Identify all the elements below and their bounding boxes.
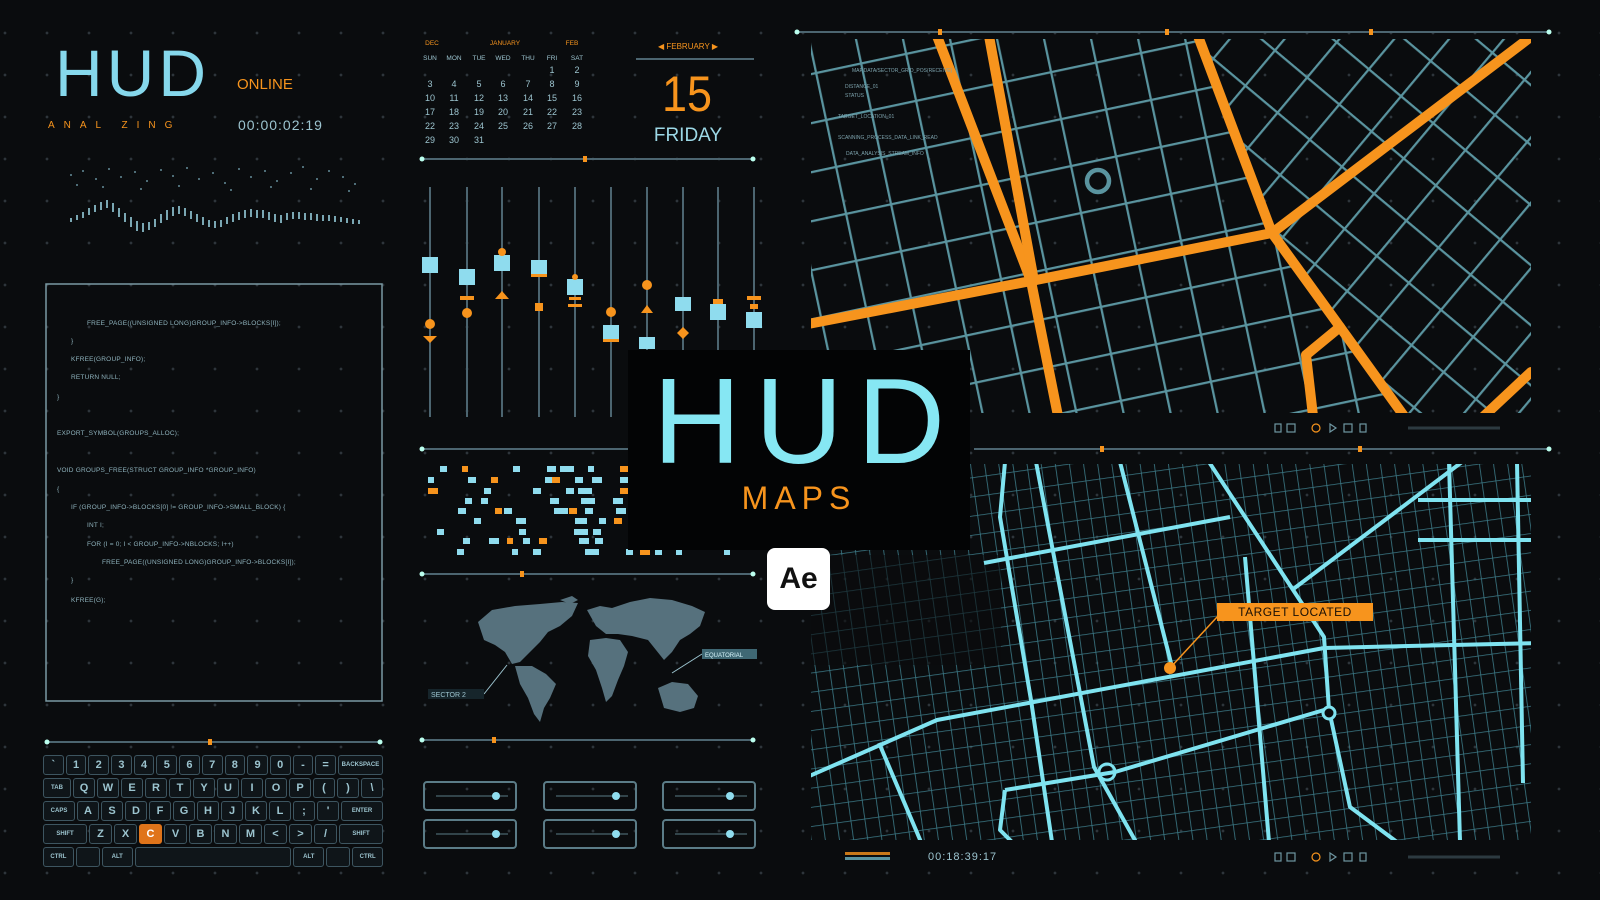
calendar: DEC [425, 40, 439, 47]
heading HUD: HUD [55, 36, 210, 110]
calendar: 23 [449, 121, 459, 131]
keyboard: = [322, 759, 329, 771]
target located callout: TARGET LOCATED [1238, 605, 1352, 619]
calendar: 12 [474, 93, 484, 103]
keyboard: K [252, 805, 260, 817]
code listing: IF (GROUP_INFO->BLOCKS[0] != GROUP_INFO->SMALL_BLOCK) { [71, 504, 286, 511]
keyboard: 8 [232, 759, 238, 771]
calendar: 27 [547, 121, 557, 131]
calendar: 17 [425, 107, 435, 117]
map1 text overlay: DISTANCE_01 [845, 84, 878, 90]
date widget: 15 [662, 67, 712, 123]
keyboard: D [132, 805, 140, 817]
keyboard: V [172, 828, 179, 840]
keyboard: 9 [254, 759, 261, 771]
keyboard: P [296, 782, 304, 794]
keyboard: F [157, 805, 163, 817]
keyboard: 7 [209, 759, 215, 771]
calendar: 14 [523, 93, 533, 103]
date widget [636, 42, 754, 146]
calendar: 16 [572, 93, 582, 103]
keyboard: T [177, 782, 183, 794]
map 1 top rule [794, 29, 1552, 35]
keyboard: - [301, 759, 305, 771]
title block [628, 350, 970, 550]
keyboard: Y [200, 782, 208, 794]
calendar: THU [521, 55, 535, 62]
calendar: 20 [498, 107, 508, 117]
code listing: INT I; [87, 522, 104, 529]
keyboard: TAB [51, 785, 63, 791]
code panel frame [46, 284, 382, 701]
calendar: 2 [574, 65, 580, 75]
keyboard: J [229, 805, 235, 817]
code listing: EXPORT_SYMBOL(GROUPS_ALLOC); [57, 430, 179, 437]
calendar: SAT [571, 55, 583, 62]
rule under equalizer [420, 446, 628, 452]
title HUD: HUD [653, 353, 959, 489]
rule above control sliders [420, 737, 756, 743]
map 2: cyan street network [805, 462, 1540, 842]
code listing: } [71, 338, 73, 345]
code listing: KFREE(GROUP_INFO); [71, 356, 145, 363]
keyboard: N [222, 828, 229, 840]
keyboard: 3 [118, 759, 124, 771]
map1 text overlay: MAP.DATA/SECTOR_GRID_POS(RECEIVE) [852, 68, 953, 74]
keyboard: CTRL [360, 854, 376, 860]
keyboard: E [128, 782, 136, 794]
calendar: FEB [566, 40, 578, 47]
calendar: 21 [523, 107, 533, 117]
waveform [70, 166, 360, 232]
calendar: FRI [547, 55, 557, 62]
code listing: { [57, 486, 59, 493]
calendar: 25 [498, 121, 508, 131]
code listing: RETURN NULL; [71, 374, 121, 381]
keyboard: < [272, 828, 279, 840]
calendar: 22 [547, 107, 557, 117]
keyboard rule [44, 739, 382, 745]
calendar: 22 [425, 121, 435, 131]
calendar: 29 [425, 135, 435, 145]
dot matrix [428, 466, 730, 555]
calendar: 10 [425, 93, 435, 103]
map label: right: EQUATORIAL [705, 653, 744, 659]
map1 text overlay: TARGET_LOCATION_01 [838, 114, 894, 120]
keyboard: Z [97, 828, 104, 840]
icon: after effects badge [767, 548, 830, 610]
calendar: 15 [547, 93, 557, 103]
calendar: 11 [449, 93, 459, 103]
analyzing label: ANAL ZING [48, 120, 181, 131]
map 1 playback controls [1275, 424, 1500, 432]
calendar: 8 [549, 79, 555, 89]
calendar: 1 [549, 65, 555, 75]
keyboard: / [324, 828, 327, 840]
keyboard: W [103, 782, 113, 794]
calendar: 19 [474, 107, 484, 117]
world map [428, 596, 757, 722]
icon: after effects badge: Ae [779, 562, 818, 595]
keyboard: I [250, 782, 254, 794]
keyboard: R [152, 782, 160, 794]
keyboard: CAPS [51, 808, 67, 814]
keyboard: 0 [277, 759, 283, 771]
keyboard: ALT [303, 854, 314, 860]
map 1: orange roads map [808, 36, 1532, 416]
control slider boxes [424, 782, 755, 848]
keyboard: SHIFT [56, 831, 74, 837]
keyboard: 4 [141, 759, 147, 771]
map1 text overlay: STATUS [845, 93, 865, 99]
calendar: 3 [427, 79, 433, 89]
keyboard: \ [370, 782, 374, 794]
rule above world map [420, 571, 756, 577]
calendar: 9 [574, 79, 580, 89]
code listing [57, 320, 296, 604]
keyboard: SHIFT [352, 831, 370, 837]
keyboard: C [147, 828, 154, 840]
keyboard: L [277, 805, 283, 817]
target located callout [1164, 603, 1373, 674]
equalizer sliders [422, 187, 762, 417]
status online: ONLINE [237, 76, 293, 93]
map1 text overlay: DATA_ANALYSIS_STREAM_INFO [846, 151, 924, 157]
calendar: 28 [572, 121, 582, 131]
date widget: FRIDAY [654, 125, 722, 146]
calendar: 31 [474, 135, 484, 145]
code listing: FREE_PAGE((UNSIGNED LONG)GROUP_INFO->BLOCKS[I]); [102, 559, 296, 566]
calendar: 7 [525, 79, 531, 89]
keyboard: X [122, 828, 129, 840]
map label: sector 2: SECTOR 2 [431, 692, 466, 699]
calendar: 6 [500, 79, 506, 89]
keyboard: M [246, 828, 255, 840]
calendar: TUE [472, 55, 486, 62]
keyboard: Q [80, 782, 88, 794]
keyboard: BACKSPACE [342, 762, 379, 768]
code listing: KFREE(G); [71, 597, 106, 604]
calendar: JANUARY [490, 40, 521, 47]
keyboard: ENTER [352, 808, 372, 814]
calendar: MON [446, 55, 462, 62]
keyboard: ; [302, 805, 306, 817]
keyboard: CTRL [50, 854, 66, 860]
calendar: 4 [451, 79, 457, 89]
keyboard: G [180, 805, 188, 817]
calendar: 26 [523, 121, 533, 131]
calendar rule [420, 156, 756, 162]
keyboard: 6 [186, 759, 193, 771]
keyboard: ' [327, 805, 329, 817]
calendar: WED [495, 55, 511, 62]
map label: right [672, 649, 757, 673]
keyboard: ) [346, 782, 350, 794]
code listing: FREE_PAGE((UNSIGNED LONG)GROUP_INFO->BLOCKS[I]); [87, 320, 281, 327]
calendar: 13 [498, 93, 508, 103]
rule between maps [974, 446, 1552, 452]
code listing: } [57, 394, 59, 401]
timecode: 00:00:02:19 [238, 117, 323, 133]
keyboard: A [84, 805, 92, 817]
calendar: 18 [449, 107, 459, 117]
keyboard: > [297, 828, 304, 840]
date widget: ◀ FEBRUARY ▶ [658, 42, 719, 51]
calendar: 5 [476, 79, 482, 89]
calendar: SUN [423, 55, 437, 62]
code listing: VOID GROUPS_FREE(STRUCT GROUP_INFO *GROUP_INFO) [57, 467, 256, 474]
keyboard: 5 [164, 759, 170, 771]
keyboard: 1 [73, 759, 79, 771]
calendar: 23 [572, 107, 582, 117]
map 2 footer: timecode and controls [845, 851, 1500, 863]
keyboard: B [197, 828, 204, 840]
keyboard: 2 [96, 759, 102, 771]
keyboard [43, 755, 383, 867]
HUD online header [48, 36, 323, 133]
keyboard: O [272, 782, 280, 794]
keyboard: ` [52, 759, 55, 771]
map1 text overlay [838, 68, 953, 157]
keyboard: S [108, 805, 116, 817]
calendar: 30 [449, 135, 459, 145]
keyboard: U [224, 782, 232, 794]
keyboard: H [204, 805, 212, 817]
code listing: FOR (I = 0; I < GROUP_INFO->NBLOCKS; I++) [87, 541, 234, 548]
calendar [423, 40, 583, 145]
code listing: } [71, 577, 73, 584]
map 2 footer: timecode and controls: 00:18:39:17 [928, 851, 997, 863]
map label: sector 2 [428, 665, 507, 699]
subtitle MAPS: MAPS [742, 480, 856, 516]
keyboard: ALT [112, 854, 123, 860]
calendar: 24 [474, 121, 484, 131]
map1 text overlay: SCANNING_PROCESS_DATA_LINK_READ [838, 135, 938, 141]
keyboard: ( [322, 782, 326, 794]
